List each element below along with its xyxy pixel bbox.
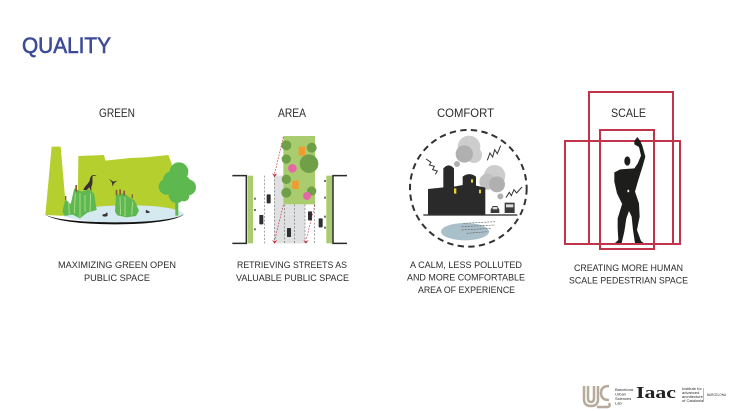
logo text: urban science lab: Sciences <box>615 396 631 401</box>
reeds <box>62 188 139 218</box>
pond <box>441 223 489 240</box>
logo text: iaac: advanced <box>682 390 699 395</box>
logo: urban science lab <box>584 386 610 407</box>
logo text: iaac: architecture <box>682 394 704 399</box>
arrows <box>275 137 315 240</box>
logo text: urban science lab: Barcelona <box>615 387 634 392</box>
caption: green <box>58 260 176 284</box>
trees and planters <box>281 140 318 198</box>
icon: street plan <box>232 136 347 244</box>
heading: area: AREA <box>278 106 306 120</box>
heron and birds <box>83 175 150 217</box>
panel: comfort <box>407 106 527 296</box>
smoke clouds <box>454 136 505 199</box>
heading: scale: SCALE <box>611 106 646 120</box>
icon: modulor figure <box>614 137 645 243</box>
caption: scale: SCALE PEDESTRIAN SPACE <box>569 276 688 286</box>
caption: comfort: AND MORE COMFORTABLE <box>407 272 525 284</box>
heading: green: GREEN <box>99 106 135 120</box>
heading: comfort: COMFORT <box>437 106 495 120</box>
car and truck <box>491 206 499 213</box>
panel: area <box>232 106 349 284</box>
logos <box>584 383 726 407</box>
caption: green: PUBLIC SPACE <box>84 273 150 284</box>
logo text: iaac: of Catalonia <box>682 398 704 403</box>
logo: iaac: Iaac <box>636 383 677 402</box>
noise squiggles <box>426 146 522 198</box>
caption: green: MAXIMIZING GREEN OPEN <box>58 260 176 271</box>
caption: comfort: A CALM, LESS POLLUTED <box>410 260 522 271</box>
caption: comfort: AREA OF EXPERIENCE <box>418 285 515 296</box>
caption: area: VALUABLE PUBLIC SPACE <box>236 273 349 284</box>
logo text: iaac <box>682 386 726 403</box>
panel: green <box>45 106 196 284</box>
cars <box>254 180 326 237</box>
logo text: urban science lab: Lab <box>615 400 622 406</box>
panel: scale <box>565 92 688 286</box>
buildings <box>428 165 485 215</box>
logo text: iaac: Institute for <box>682 386 702 391</box>
caption: scale <box>569 263 688 286</box>
logo text: urban science lab: Urban <box>615 392 626 396</box>
caption: area: RETRIEVING STREETS AS <box>237 260 347 271</box>
icon: red scale frames <box>565 92 680 249</box>
logo text: iaac: BARCELONA <box>707 393 726 397</box>
caption: area <box>236 260 349 284</box>
title: QUALITY <box>22 33 111 58</box>
caption: scale: CREATING MORE HUMAN <box>574 263 683 274</box>
icon: green landscape with pond <box>45 147 196 224</box>
logo text: urban science lab <box>615 387 634 406</box>
tree <box>159 162 196 216</box>
caption: comfort <box>407 260 525 296</box>
icon: polluted city in dashed circle <box>410 130 527 247</box>
